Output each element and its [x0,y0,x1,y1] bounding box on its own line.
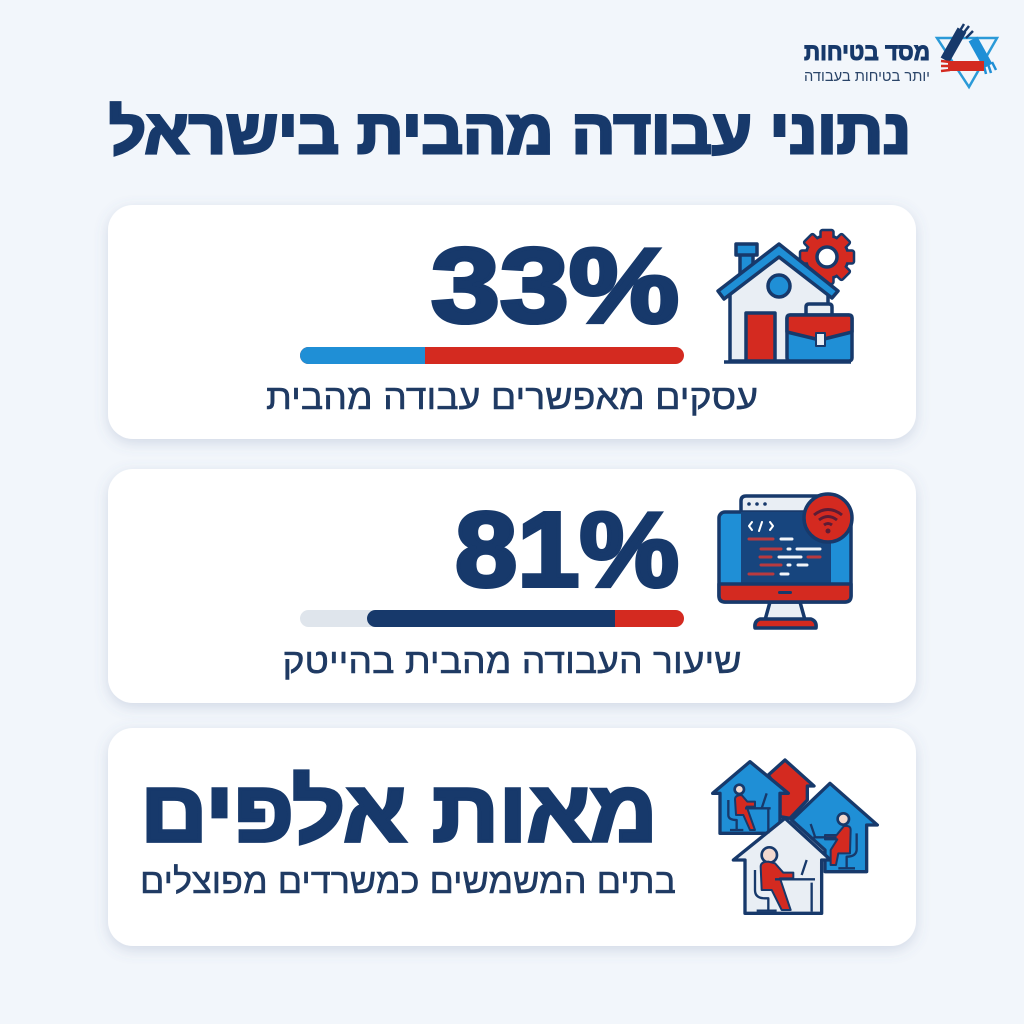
gear [800,230,854,284]
progress bar [300,347,684,364]
caption: עסקים מאפשרים עבודה מהבית [266,378,758,417]
title: נתוני עבודה מהבית בישראל [109,98,911,167]
logo wordmark: מסד בטיחות [804,39,930,66]
logo [804,24,997,87]
stat: 81%: 81% [455,491,679,609]
caption: בתים המשמשים כמשרדים מפוצלים [140,862,676,901]
panel: hundreds of thousands of home offices [108,728,916,946]
stat: 33%: 33% [431,227,679,345]
stat: hundreds of thousands: מאות אלפים [140,764,658,860]
icon: home office [718,230,854,362]
logo star mark [937,24,997,87]
progress bar [300,610,684,627]
logo tagline: יותר בטיחות בעבודה [804,68,930,85]
caption: שיעור העבודה מהבית בהייטק [282,642,742,681]
panel: hi-tech remote work rate [108,469,916,703]
icon: computer with code and wifi [719,494,852,628]
panel: businesses allowing remote work [108,205,916,439]
icon: people working from home [713,760,877,913]
